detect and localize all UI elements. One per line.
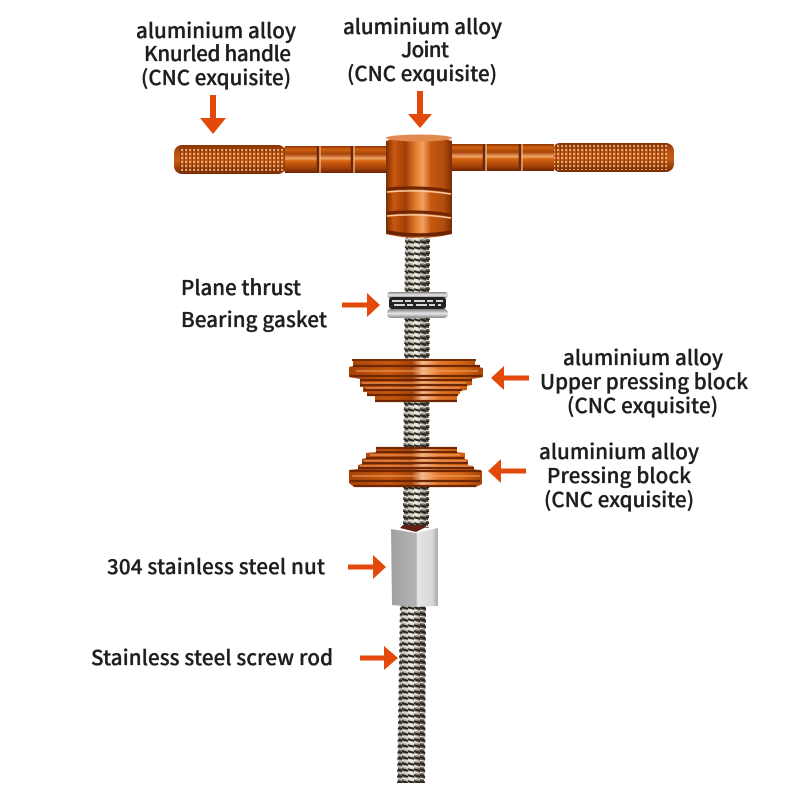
arrow: pressing block — [488, 459, 526, 483]
label: bearing gasket: Plane thrust — [181, 271, 301, 301]
smooth shafts — [285, 144, 554, 173]
label: upper pressing block — [540, 341, 748, 419]
right knurled grip — [552, 143, 674, 172]
label: knurled handle — [136, 14, 296, 91]
joint block — [386, 134, 452, 238]
label: nut: 304 stainless steel nut — [107, 550, 325, 580]
label: joint: aluminium alloy — [343, 10, 502, 40]
label: upper pressing block: aluminium alloy — [563, 341, 723, 371]
lower pressing block — [349, 447, 482, 487]
label: pressing block: (CNC exquisite) — [544, 483, 694, 513]
label: pressing block: Pressing block — [547, 459, 691, 489]
bearing gasket washers — [387, 292, 448, 318]
screw rod — [397, 236, 430, 783]
label: upper pressing block: Upper pressing block — [540, 365, 748, 395]
label: screw rod: Stainless steel screw rod — [91, 641, 333, 671]
arrow: nut — [348, 555, 386, 579]
label: knurled handle: Knurled handle — [144, 37, 291, 67]
label: pressing block — [539, 435, 699, 513]
arrow: upper block — [491, 366, 529, 390]
arrow: gasket — [342, 293, 380, 317]
label: bearing gasket: Bearing gasket — [181, 303, 327, 333]
label: joint — [343, 10, 502, 87]
label: joint: (CNC exquisite) — [347, 57, 497, 87]
upper pressing block — [349, 360, 483, 402]
left knurled grip — [174, 145, 286, 174]
T-handle — [174, 134, 674, 238]
label: joint: Joint — [401, 33, 449, 63]
label: knurled handle: (CNC exquisite) — [141, 61, 291, 91]
arrow: screw rod — [360, 646, 398, 670]
arrow: joint — [408, 91, 432, 128]
label: bearing gasket — [181, 271, 327, 333]
arrow: knurled handle — [200, 95, 226, 134]
label: upper pressing block: (CNC exquisite) — [567, 389, 718, 419]
label: pressing block: aluminium alloy — [539, 435, 699, 465]
label: knurled handle: aluminium alloy — [136, 14, 296, 44]
stainless steel nut — [391, 525, 438, 607]
